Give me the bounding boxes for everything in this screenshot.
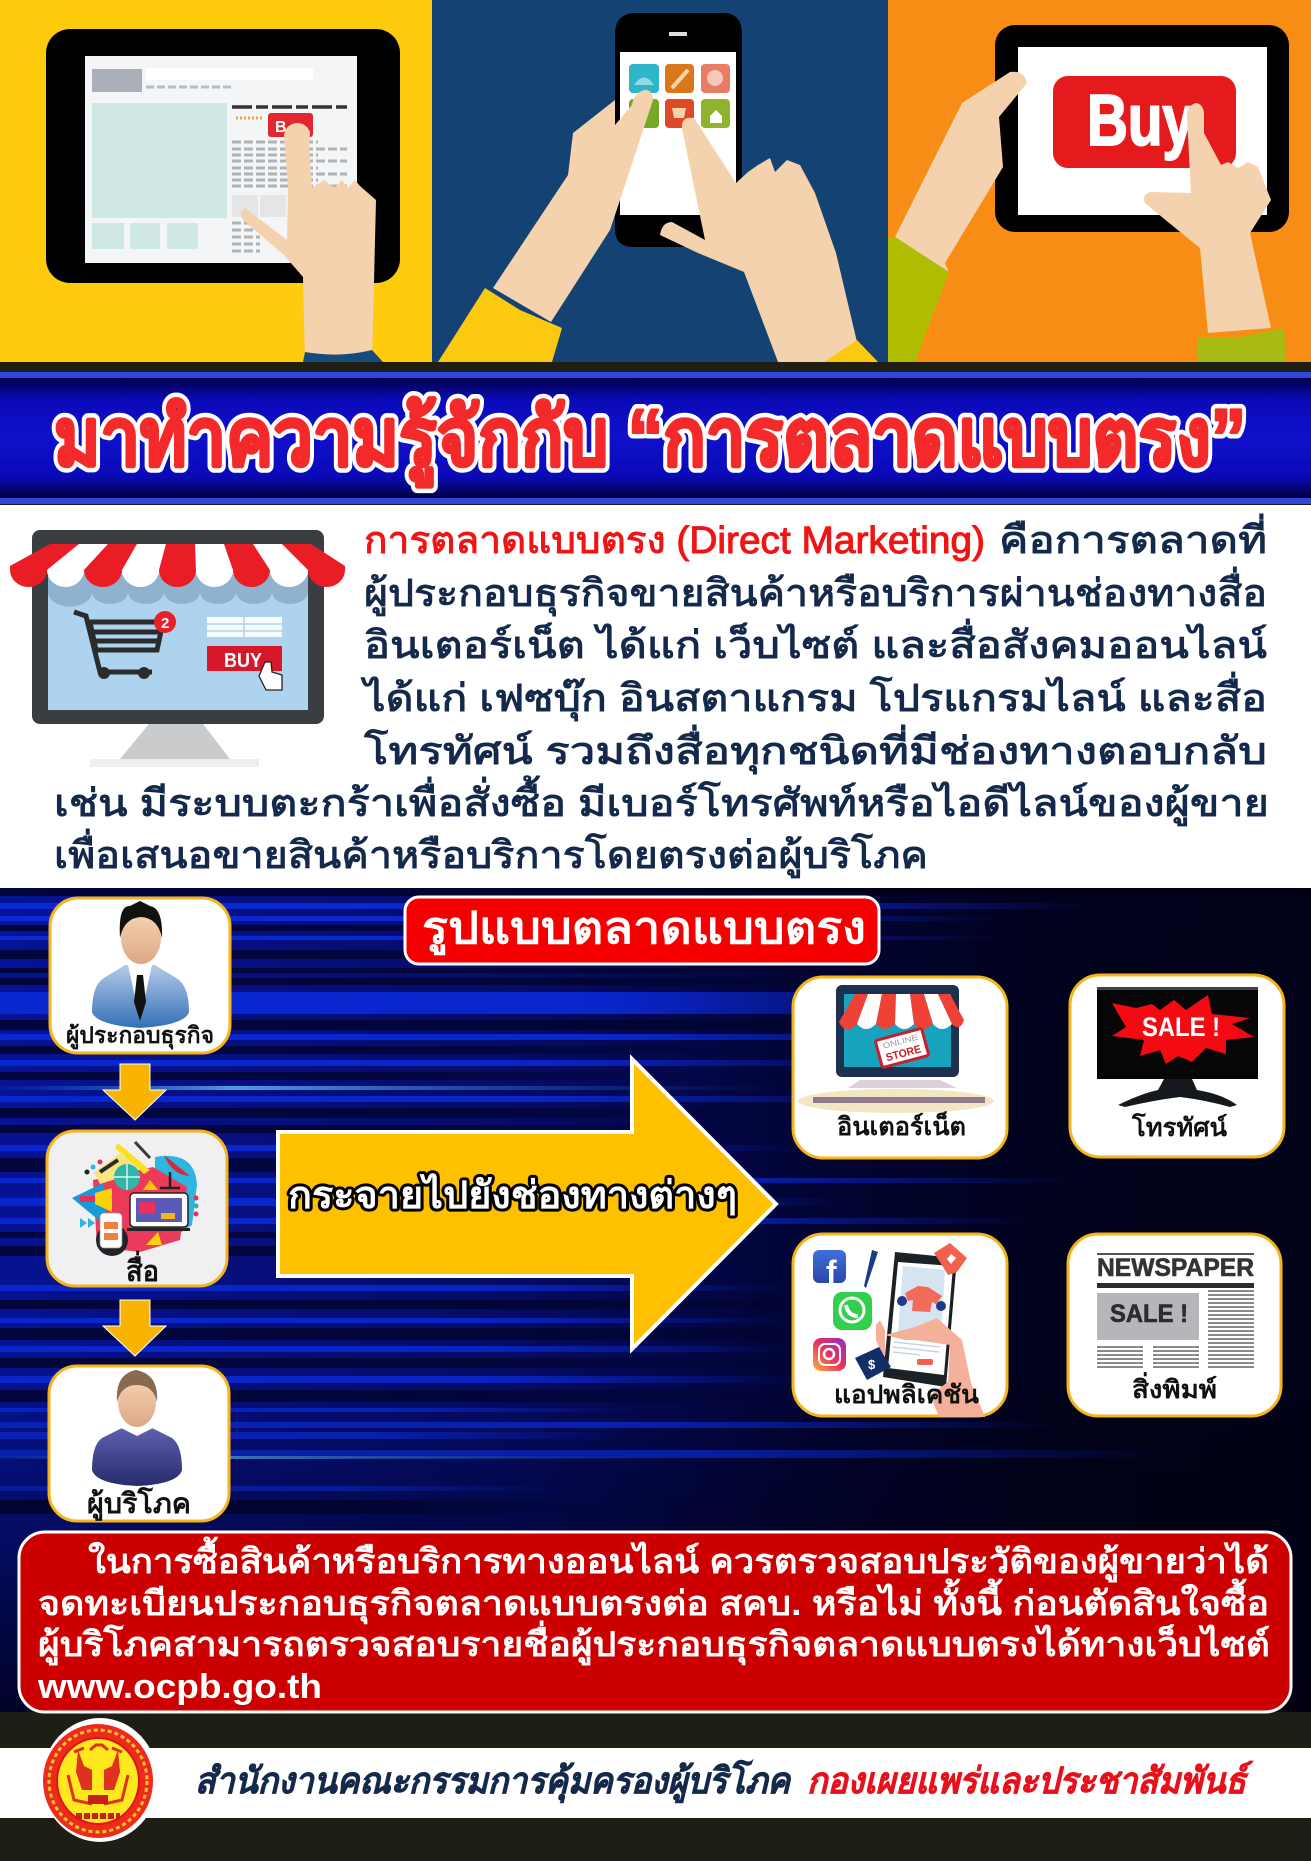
footer band [0,1712,1311,1861]
icon: online shop monitor: BUY [224,650,263,672]
heading: forms of direct marketing [405,897,879,964]
card: consumer [49,1366,229,1521]
text block: definition: โทรทัศน์ รวมถึงสื่อทุกชนิดที่มีช่องทางตอบกลับ [364,725,1267,774]
card: television [1070,975,1284,1157]
panel: direct marketing forms [0,888,1311,1713]
icon: tv sale: SALE ! [1142,1012,1220,1042]
text block: definition: ผู้ประกอบธุรกิจขายสินค้าหรือบริการผ่านช่องทางสื่อ [364,567,1267,616]
label: แอปพลิเคชัน [834,1381,979,1409]
arrow: down 2 [103,1300,166,1356]
card: print [1068,1234,1281,1416]
callout: red warning: ผู้บริโภคสามารถตรวจสอบรายชื่อผู้ประกอบธุรกิจตลาดแบบตรงได้ทางเว็บไซต์ [38,1620,1270,1666]
icon: newspaper: SALE ! [1110,1300,1188,1328]
icon: newspaper: NEWSPAPER [1097,1254,1254,1282]
icon: apps and phone [813,1243,985,1417]
panel: tablet Buy on orange [888,0,1311,362]
card: internet [793,977,1007,1158]
text block: definition [54,514,1269,878]
text block: definition: อินเตอร์เน็ต ได้แก่ เว็บไซต์ และสื่อสังคมออนไลน์ [364,619,1267,667]
icon: online shop monitor [10,530,345,767]
text block: definition: การตลาดแบบตรง (Direct Marketing) [364,520,985,562]
label: อินเตอร์เน็ต [837,1111,966,1141]
icon: online shop monitor: 2 [161,615,169,632]
icon: online store: ONLINE [882,1033,919,1051]
icon: businessman [92,901,189,1028]
text: division name: กองเผยแพร่และประชาสัมพันธ์ [807,1760,1253,1801]
callout: red warning [19,1532,1291,1712]
card: application [793,1234,1007,1417]
title band [0,362,1311,505]
card: business operator [50,898,230,1053]
callout: red warning: ในการซื้อสินค้าหรือบริการทางออนไลน์ ควรตรวจสอบประวัติของผู้ขายว่าได้ [88,1536,1269,1583]
arrow: down 1 [103,1064,166,1120]
big arrow [278,1059,776,1349]
text block: definition: เพื่อเสนอขายสินค้าหรือบริการโดยตรงต่อผู้บริโภค [54,829,928,878]
icon: online store: STORE [885,1043,922,1064]
icon: apps and phone: $ [868,1357,876,1372]
label: ผู้ประกอบธุรกิจ [66,1022,214,1050]
callout: red warning: จดทะเบียนประกอบธุรกิจตลาดแบบตรงต่อ สคบ. หรือไม่ ทั้งนี้ ก่อนตัดสินใจซื้อ [38,1578,1269,1625]
card: media [47,1131,227,1288]
icon: online store [798,985,994,1113]
label: โทรทัศน์ [1131,1112,1227,1142]
callout: red warning: www.ocpb.go.th [37,1668,322,1706]
icon: apps and phone: f [826,1254,837,1290]
icon: tv sale [1097,987,1258,1107]
panel: tablet on yellow [0,0,432,362]
label: สิ่งพิมพ์ [1132,1372,1217,1404]
icon: consumer [92,1370,182,1486]
text block: definition: คือการตลาดที่ [999,514,1267,562]
text: office name: สำนักงานคณะกรรมการคุ้มครองผู้บริโภค [195,1759,792,1803]
icon: newspaper [1097,1253,1254,1367]
label: ผู้บริโภค [87,1486,191,1521]
label: สื่อ [126,1250,159,1288]
heading: forms of direct marketing: รูปแบบตลาดแบบตรง [422,904,866,955]
logo: seal [42,1718,158,1842]
text block: definition: ได้แก่ เฟซบุ๊ก อินสตาแกรม โปรแกรมไลน์ และสื่อ [361,672,1267,721]
big arrow: กระจายไปยังช่องทางต่างๆ [288,1173,737,1217]
panel: intro white [0,505,1311,888]
icon: media collage [72,1142,198,1256]
panel: phone on navy [432,0,888,362]
panel: tablet Buy on orange: Buy [1087,81,1194,161]
panel: tablet on yellow: B [275,119,287,136]
text block: definition: เช่น มีระบบตะกร้าเพื่อสั่งซื้อ มีเบอร์โทรศัพท์หรือไอดีไลน์ของผู้ขาย [54,775,1269,826]
